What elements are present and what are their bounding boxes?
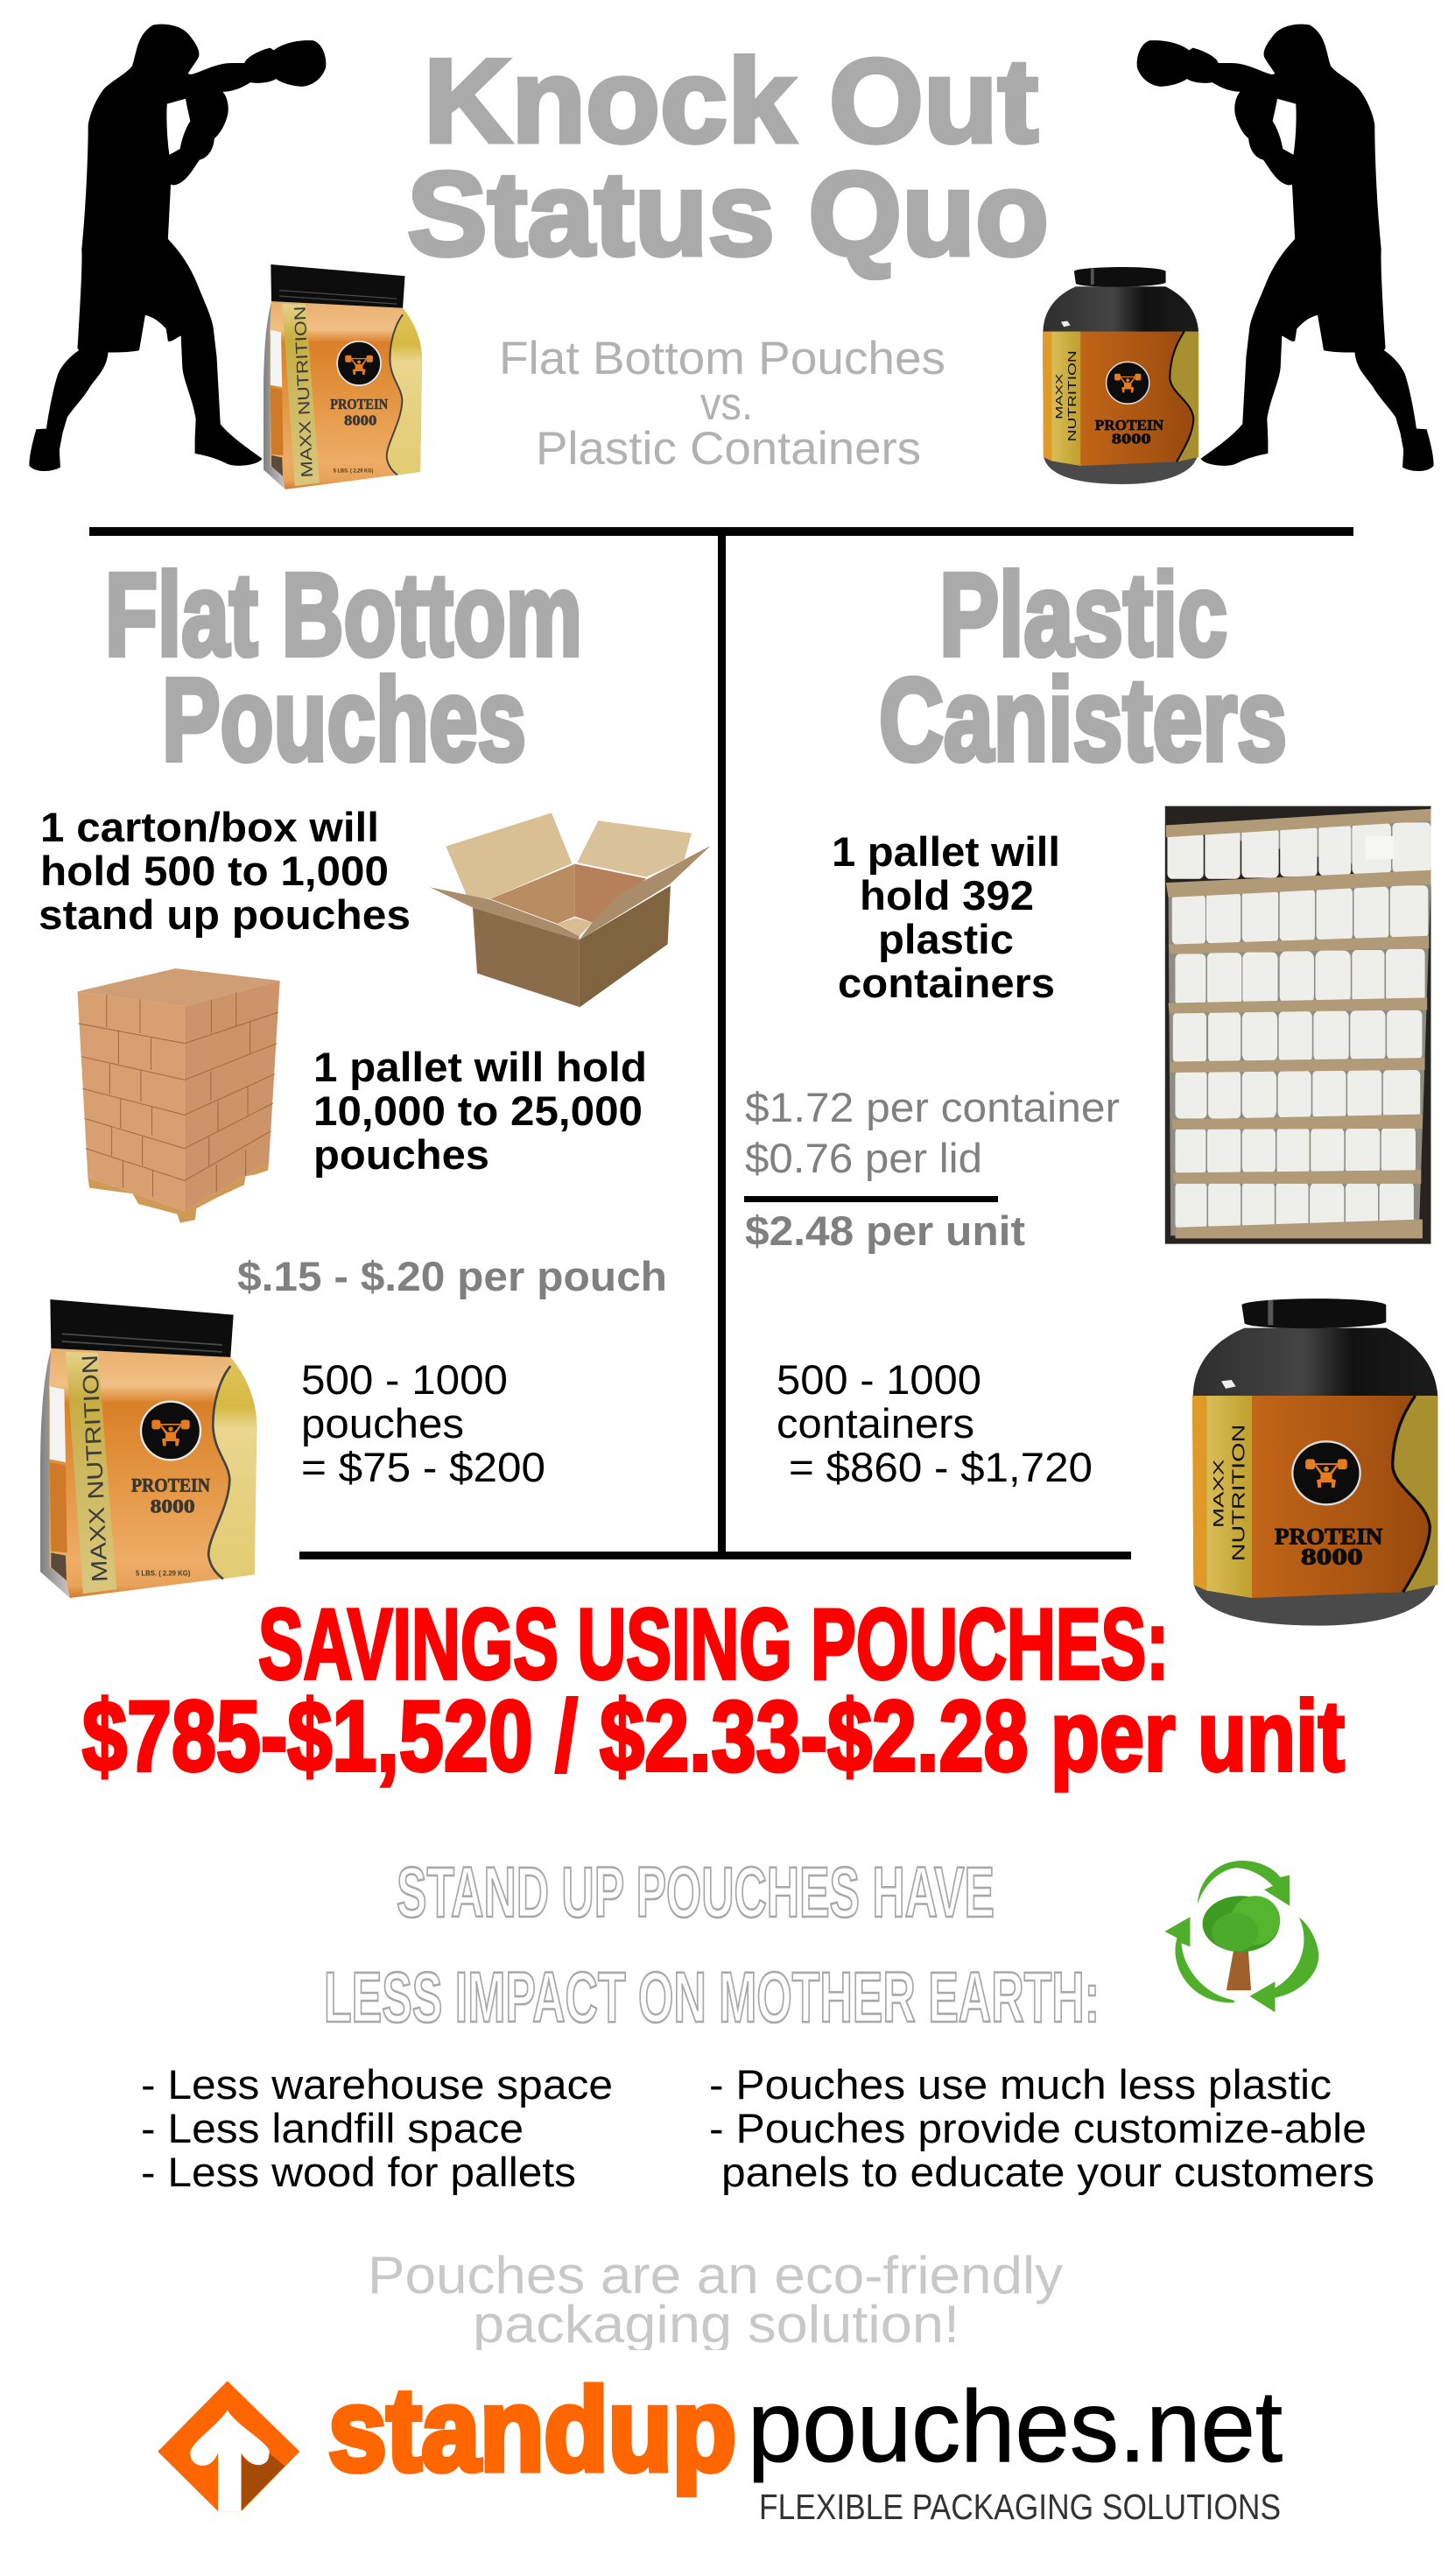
- icon: right boxer silhouette: [1137, 25, 1434, 471]
- list: plastic benefits: [709, 2061, 1374, 2195]
- icon: small pouch: 8000: [344, 412, 376, 428]
- heading: plastic canisters: Canisters: [879, 655, 1287, 785]
- text: container cost total: 500 - 1000: [777, 1356, 981, 1403]
- icon: small plastic container: PROTEIN: [1095, 417, 1163, 433]
- logo wordmark: pouches.net: [748, 2369, 1283, 2483]
- text: price per pouch: $.15 - $.20 per pouch: [237, 1253, 667, 1299]
- text: pallet capacity for pouches: 10,000 to 25,000: [313, 1087, 643, 1134]
- subtitle: Flat Bottom Pouches: [499, 333, 945, 384]
- title: [407, 34, 1049, 280]
- title: Status Quo: [407, 147, 1049, 280]
- icon: large plastic container: PROTEIN: [1275, 1524, 1383, 1549]
- icon: large pouch: [40, 1299, 257, 1598]
- callout: savings: [82, 1589, 1345, 1792]
- heading: flat bottom pouches: Pouches: [162, 655, 526, 785]
- icon: left boxer silhouette: [29, 25, 326, 471]
- bottom divider bar: [299, 1552, 1131, 1559]
- icon: small plastic container: NUTRITION: [1065, 350, 1079, 441]
- subtitle: Plastic Containers: [536, 423, 921, 475]
- heading: mother earth: [324, 1853, 1100, 2038]
- icon: pallet of boxes: [77, 968, 280, 1223]
- logo wordmark: standup: [328, 2365, 736, 2495]
- subtitle: vs.: [700, 378, 753, 430]
- text: eco-friendly statement: [368, 2246, 1063, 2354]
- text: pouch cost total: = $75 - $200: [301, 1444, 545, 1490]
- icon: large pouch: 8000: [151, 1495, 195, 1517]
- icon: small pouch: 5 LBS. ( 2.29 KG): [334, 468, 373, 475]
- text: container cost total: = $860 - $1,720: [789, 1444, 1093, 1490]
- text: eco-friendly statement: packaging solution!: [473, 2295, 959, 2354]
- text: carton capacity: hold 500 to 1,000: [40, 848, 389, 894]
- title: Knock Out: [424, 34, 1038, 167]
- subtitle: [499, 333, 945, 475]
- text: pallet capacity for pouches: 1 pallet will hold: [313, 1044, 647, 1090]
- heading: mother earth: STAND UP POUCHES HAVE: [397, 1853, 995, 1932]
- logo tagline: FLEXIBLE PACKAGING SOLUTIONS: [759, 2487, 1281, 2527]
- list: plastic benefits: - Pouches provide customize-able: [709, 2105, 1367, 2151]
- list: plastic benefits: panels to educate your customers: [721, 2149, 1374, 2195]
- icon: large plastic container: 8000: [1301, 1545, 1363, 1570]
- photo: pallet of plastic containers: [1165, 806, 1430, 1244]
- list: warehouse benefits: - Less wood for pallets: [141, 2149, 576, 2195]
- icon: small plastic container: [1043, 267, 1198, 484]
- text: eco-friendly statement: Pouches are an eco-friendly: [368, 2246, 1063, 2305]
- text: carton capacity: [39, 804, 411, 938]
- text: container pricing: $2.48 per unit: [745, 1207, 1025, 1254]
- icon: standuppouches logo mark: [158, 2381, 299, 2511]
- text: pouch cost total: pouches: [301, 1400, 464, 1446]
- text: pouch cost total: 500 - 1000: [301, 1356, 508, 1403]
- top divider bar: [89, 527, 1353, 536]
- list: warehouse benefits: - Less warehouse space: [141, 2061, 613, 2108]
- text: pallet capacity for containers: containers: [838, 960, 1055, 1006]
- icon: small pouch: MAXX NUTRITION: [291, 306, 316, 478]
- heading: plastic canisters: Plastic: [939, 550, 1227, 680]
- text: pallet capacity for pouches: pouches: [313, 1131, 489, 1178]
- text: pallet capacity for containers: plastic: [878, 916, 1014, 962]
- icon: small pouch: [264, 264, 422, 489]
- icon: tree with recycling arrows: [1164, 1861, 1318, 2012]
- list: warehouse benefits: [141, 2061, 613, 2195]
- icon: small plastic container: 8000: [1112, 430, 1151, 447]
- icon: large pouch: PROTEIN: [131, 1474, 211, 1496]
- centre divider bar: [718, 536, 726, 1555]
- text: pallet capacity for containers: 1 pallet will: [832, 828, 1060, 875]
- icon: small pouch: PROTEIN: [330, 396, 388, 412]
- icon: large plastic container: MAXX: [1210, 1460, 1227, 1528]
- text: container pricing: [744, 1084, 1120, 1254]
- text: pallet capacity for containers: hold 392: [860, 872, 1034, 918]
- text: pallet capacity for pouches: [313, 1044, 647, 1178]
- logo wordmark: [328, 2365, 1283, 2495]
- text: carton capacity: stand up pouches: [39, 891, 411, 938]
- text: carton capacity: 1 carton/box will: [40, 804, 379, 850]
- icon: small plastic container: MAXX: [1055, 374, 1065, 419]
- text: container cost total: [777, 1356, 1093, 1490]
- list: plastic benefits: - Pouches use much less plastic: [709, 2061, 1332, 2108]
- text: pouch cost total: [301, 1356, 545, 1490]
- cover cropping descenders of eco line: [438, 2350, 998, 2368]
- icon: large pouch: 5 LBS. ( 2.29 KG): [136, 1568, 190, 1577]
- icon: large plastic container: NUTRITION: [1229, 1425, 1249, 1561]
- icon: large pouch: MAXX NUTRITION: [78, 1355, 113, 1583]
- text: container pricing: $0.76 per lid: [745, 1135, 982, 1181]
- icon: large plastic container: [1192, 1299, 1437, 1626]
- text: container cost total: containers: [777, 1400, 974, 1446]
- list: warehouse benefits: - Less landfill space: [141, 2105, 524, 2151]
- heading: flat bottom pouches: [105, 550, 582, 785]
- icon: open cardboard box: [430, 813, 711, 1008]
- text: pallet capacity for containers: [832, 828, 1060, 1006]
- text: container pricing: $1.72 per container: [745, 1084, 1120, 1130]
- heading: flat bottom pouches: Flat Bottom: [105, 550, 582, 680]
- heading: plastic canisters: [879, 550, 1287, 785]
